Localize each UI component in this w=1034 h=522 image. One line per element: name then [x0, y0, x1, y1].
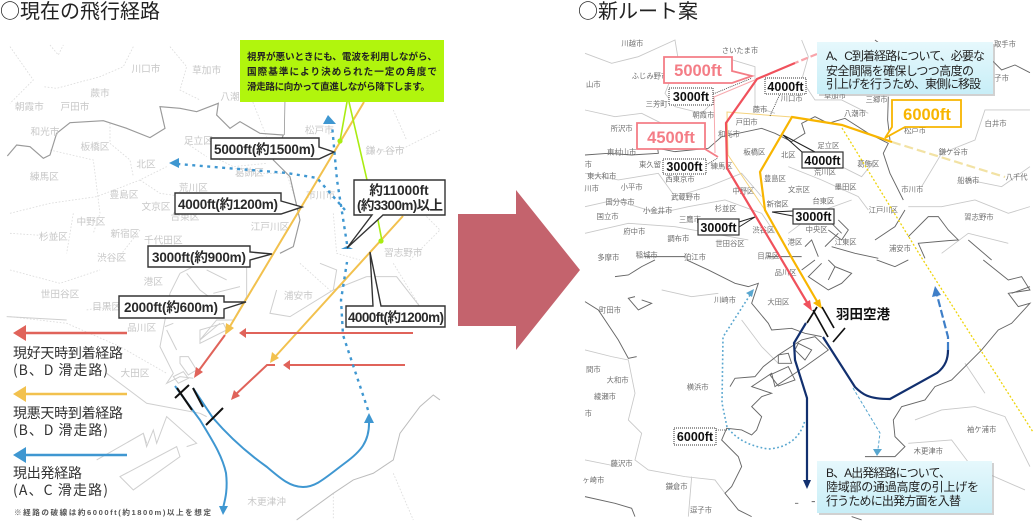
map: new route base map: 横浜市	[687, 383, 709, 392]
map: current routes base map: 練馬区	[30, 171, 59, 183]
map: new route base map: 江戸川区	[869, 206, 898, 215]
map: new route base map: 鎌倉市	[666, 482, 688, 491]
map: new route base map: 取手市	[994, 39, 1016, 48]
label: Haneda Airport: 羽田空港	[836, 307, 890, 322]
map: current routes base map: 文京区	[142, 201, 171, 213]
map: new route base map: 鎌ケ谷市	[939, 147, 968, 156]
map: current routes base map: 八潮	[220, 91, 240, 103]
map: new route base map: 小平市	[621, 182, 643, 191]
icon: Haneda runways	[807, 307, 845, 342]
map: new route base map: 港区	[788, 238, 802, 247]
map: new route base map: 世田谷区	[715, 239, 745, 248]
label: 3000ft solid left: 3000ft	[700, 221, 737, 235]
route: new arrival (orange)	[760, 117, 1005, 309]
route: good-weather arrivals (red)	[194, 328, 413, 400]
label: 2000ft	[119, 296, 246, 318]
legend: ※経路の破線は約6000ft(約1800m)以上を想定	[14, 507, 211, 517]
map: new route base map: 中野区	[732, 187, 754, 196]
map: new route base map: 足立区	[817, 141, 839, 150]
map: new route base map: 川崎市	[714, 296, 736, 305]
map: new route base map: 山市	[586, 80, 601, 89]
map: current routes base map	[7, 45, 440, 520]
map: current routes base map: 北区	[136, 160, 156, 171]
map: new route base map: 西東京市	[665, 174, 695, 183]
map: new route base map: 多摩市	[597, 253, 619, 262]
map: new route base map: 東大和市	[587, 172, 616, 181]
map: new route base map: 狛江市	[684, 253, 706, 262]
callout: B, A departure change: B、A出発経路について、	[826, 465, 951, 480]
callout: ILS approach explanation: 国際基準により決められた一定の角度で	[247, 66, 437, 78]
callout: A, C arrival change: A、C到着経路について、必要な	[826, 48, 985, 63]
label: 4000ft dotted: 4000ft	[767, 80, 804, 94]
map: current routes base map: 蕨市	[90, 88, 110, 100]
label: 3000ft dotted lower: 3000ft	[666, 160, 703, 174]
map: new route base map: 習志野市	[964, 213, 994, 222]
label: 4000ft solid	[783, 135, 843, 168]
panel: current flight routes	[0, 0, 445, 520]
map: new route base map: 所沢市	[611, 124, 633, 133]
map: current routes base map: 千代田区	[144, 236, 183, 247]
map: new route base map: 松戸市	[904, 126, 926, 135]
legend: (A、C 滑走路)	[13, 480, 108, 500]
map: new route base map: 新宿区	[767, 199, 789, 208]
legend	[13, 325, 211, 517]
map: current routes base map: 江戸川区	[251, 222, 290, 233]
label: 3000ft dotted upper: 3000ft	[673, 90, 710, 104]
map: new route base map: 木更津市	[914, 447, 943, 456]
map: new route base map: 国分寺市	[605, 197, 635, 206]
map: current routes base map: 目黒区	[92, 302, 121, 313]
map: current routes base map: 習志野市	[384, 247, 423, 259]
legend: (B、D 滑走路)	[13, 420, 108, 440]
map: new route base map: 武蔵野市	[671, 192, 700, 201]
label: 4000ft lower	[346, 252, 445, 327]
map: new route base map: 東久留	[639, 160, 661, 169]
map: new route base map: 大和市	[607, 376, 629, 385]
map: new route base map: 渋谷区	[752, 226, 774, 235]
panel: proposed new routes	[578, 0, 1033, 520]
map: current routes base map: 大田区	[121, 368, 150, 380]
label: 3000ft	[148, 246, 272, 267]
map: new route base map: 袖ケ浦市	[967, 425, 996, 434]
map: new route base map	[582, 39, 1030, 520]
map: current routes base map: 板橋区	[81, 141, 110, 153]
map: new route base map: 品川区	[775, 268, 797, 277]
map: new route base map: 朝霞市	[692, 111, 714, 120]
map: new route base map: 町田市	[599, 306, 621, 315]
label: 3000ft solid left	[698, 217, 755, 235]
label: 4000ft lower: 4000ft(約1200m)	[348, 309, 444, 325]
map: current routes base map: 草加市	[192, 65, 221, 77]
label: 3000ft dotted lower	[663, 158, 718, 174]
route: new departure (navy)	[794, 323, 948, 489]
callout: B, A departure change	[817, 461, 994, 515]
map: new route base map: 船橋市	[957, 176, 979, 185]
map: current routes base map: 港区	[144, 276, 163, 288]
map: new route base map: 府中市	[623, 227, 645, 236]
map: new route base map: 八潮市	[844, 109, 866, 118]
label: 11000ft: (約3300m)以上	[357, 197, 443, 213]
label: 6000ft dotted: 6000ft	[677, 430, 714, 444]
route: dotted low departure (light blue)	[722, 289, 882, 456]
callout: B, A departure change: 陸域部の通過高度の引上げを	[826, 480, 979, 494]
map: current routes base map: 杉並区	[39, 231, 68, 243]
map: new route base map: 浦安市	[889, 244, 911, 253]
map: new route base map: 板橋区	[743, 148, 765, 157]
map: current routes base map: 和光市	[31, 126, 60, 138]
legend: 現悪天時到着経路	[13, 403, 123, 423]
arrow: from current to new route	[458, 190, 580, 350]
map: new route base map: ふじみ野市	[632, 72, 668, 81]
map: new route base map: 豊島区	[764, 174, 786, 183]
map: current routes base map: 渋谷区	[97, 252, 126, 264]
label: 3000ft solid right: 3000ft	[795, 210, 832, 224]
label: 4500ft pink: 4500ft	[647, 129, 695, 147]
callout: ILS approach explanation	[240, 40, 444, 244]
label: 4000ft dotted	[765, 78, 806, 116]
map: current routes base map: 新宿区	[111, 228, 140, 240]
label: 3000ft dotted upper	[669, 78, 752, 105]
map: new route base map: 間市	[586, 365, 601, 374]
map: new route base map: 北区	[781, 151, 796, 160]
label: 11000ft	[347, 180, 445, 248]
label: 2000ft: 2000ft(約600m)	[124, 299, 218, 315]
map: new route base map: 綾瀬市	[594, 392, 616, 401]
map: new route base map: 小金井市	[643, 206, 672, 215]
route: bad-weather arrivals (yellow)	[225, 102, 403, 363]
map: current routes base map: 市川市	[306, 190, 335, 202]
map: current routes base map: 台東区	[170, 211, 200, 223]
map: new route base map: 文京区	[788, 185, 810, 194]
map: current routes base map: 葛飾区	[235, 167, 264, 179]
map: current routes base map: 朝霞市	[15, 101, 44, 113]
map: new route base map: 和光市	[718, 129, 740, 138]
label: 5000ft pink	[664, 57, 752, 83]
map: current routes base map: 戸田市	[61, 101, 90, 113]
label: 4000ft solid: 4000ft	[804, 154, 841, 168]
map: new route base map: 葛飾区	[857, 159, 879, 168]
label: 3000ft solid right	[772, 209, 834, 224]
map: new route base map: 台東区	[812, 197, 834, 206]
map: new route base map: 川越市	[621, 39, 643, 48]
map: new route base map: 三鷹市	[679, 215, 701, 224]
map: current routes base map: 川口市	[132, 63, 161, 75]
legend: 現好天時到着経路	[13, 343, 123, 363]
map: current routes base map: 荒川区	[179, 182, 208, 194]
map: current routes base map: 浦安市	[284, 290, 313, 302]
map: new route base map: 川市	[584, 184, 599, 193]
label: 5000ft	[211, 138, 334, 159]
map: new route base map: 中央区	[806, 225, 828, 234]
callout: A, C arrival change	[817, 42, 995, 96]
map: current routes base map: 世田谷区	[41, 289, 80, 301]
map: new route base map: 国立市	[597, 212, 619, 221]
map: new route base map: 調布市	[667, 234, 689, 243]
label: 6000ft orange: 6000ft	[903, 106, 951, 124]
route: new A/C arrival (red)	[726, 54, 817, 311]
map: new route base map: 藤沢市	[611, 459, 633, 468]
map: current routes base map: 木更津沖	[247, 496, 286, 508]
map: current routes base map: 松戸市	[305, 125, 334, 137]
map: new route base map: ヶ崎市	[582, 476, 604, 485]
map: new route base map: 三郷市	[866, 95, 888, 104]
legend: (B、D 滑走路)	[13, 360, 108, 380]
map: new route base map: 杉並区	[715, 204, 737, 213]
map: new route base map: 川口市	[781, 94, 803, 103]
route: new departure dashed (blue)	[932, 286, 948, 350]
map: new route base map: 草加市	[824, 91, 846, 100]
map: new route base map: 戸田市	[736, 118, 758, 127]
label: 4000ft	[175, 193, 302, 214]
map: new route base map: 市川市	[901, 185, 923, 194]
map: new route base map: 逗子市	[690, 506, 712, 515]
map: new route base map: 子市	[994, 73, 1009, 82]
map: new route base map: 稲城市	[636, 251, 658, 260]
label: 5000ft: 5000ft(約1500m)	[214, 141, 315, 157]
map: current routes base map: 鎌ヶ谷市	[366, 145, 405, 157]
label: 11000ft: 約11000ft	[369, 182, 429, 198]
map: new route base map: 江東区	[835, 238, 857, 247]
legend: 現出発経路	[13, 463, 82, 483]
icon: runways	[175, 385, 223, 425]
map: new route base map: 白井市	[985, 119, 1007, 128]
callout: B, A departure change: 行うために出発方面を入替	[826, 493, 961, 508]
label: 6000ft orange	[885, 100, 961, 138]
route: departures solid (blue)	[175, 386, 374, 515]
callout: A, C arrival change: 安全間隔を確保しつつ高度の	[826, 63, 974, 78]
map: new route base map: 目黒区	[757, 252, 779, 261]
map: new route base map: 大田区	[767, 298, 789, 307]
label: 5000ft pink: 5000ft	[674, 62, 722, 80]
callout: A, C arrival change: 引上げを行うため、東側に移設	[826, 77, 981, 91]
callout: ILS approach explanation: 滑走路に向かって直進しながら降下します。	[247, 81, 430, 93]
map: new route base map: 三芳町	[646, 99, 668, 108]
callout: ILS approach explanation: 視界が悪いときにも、電波を利用しながら、	[247, 51, 437, 63]
map: current routes base map: 足立区	[184, 135, 213, 147]
label: 4500ft pink	[637, 123, 718, 157]
label: 6000ft dotted	[674, 428, 727, 445]
map: new route base map: 市	[585, 160, 592, 169]
map: new route base map: 墨田区	[835, 183, 857, 192]
route: departures dashed (blue)	[169, 115, 368, 410]
map: new route base map: 練馬区	[711, 162, 733, 171]
label: 3000ft: 3000ft(約900m)	[152, 249, 246, 265]
map: new route base map: 荒川区	[814, 168, 836, 177]
map: current routes base map: 品川区	[127, 323, 156, 334]
map: current routes base map: 中野区	[77, 216, 106, 228]
map: new route base map: 東村山市	[607, 148, 636, 157]
map: new route base map: さいたま市	[722, 46, 758, 55]
label: 4000ft: 4000ft(約1200m)	[178, 196, 278, 212]
route: thin pale reference lines	[714, 79, 1033, 432]
map: new route base map: 八千代	[1006, 173, 1028, 182]
map: current routes base map: 豊島区	[110, 189, 139, 201]
map: new route base map: 市	[585, 409, 592, 418]
map: new route base map: 蕨市	[753, 105, 767, 114]
